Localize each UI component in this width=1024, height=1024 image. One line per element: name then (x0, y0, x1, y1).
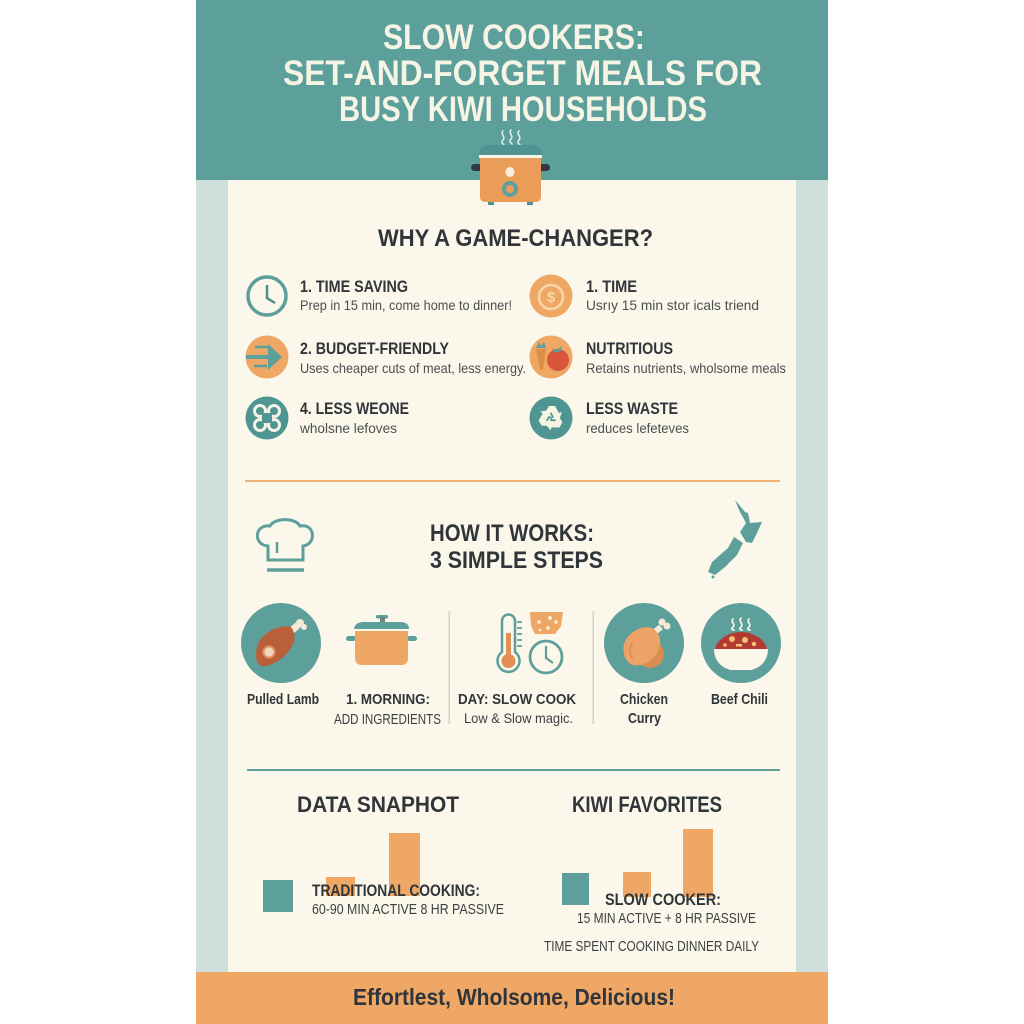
side strips (196, 170, 828, 980)
chart: traditional cooking: TRADITIONAL COOKING: (312, 882, 480, 900)
chart: traditional cooking: DATA SNAPHOT (297, 792, 460, 817)
benefit: budget-friendly: 2. BUDGET-FRIENDLY (300, 340, 449, 358)
chart: slow cooker: TIME SPENT COOKING DINNER DAILY (544, 939, 759, 955)
icon: recycle (530, 396, 572, 440)
step: pulled lamb (241, 603, 321, 708)
step: morning add ingredients (334, 615, 441, 728)
step: day slow cook (458, 612, 576, 726)
benefit: nutritious: Retains nutrients, wholsome meals (586, 360, 786, 376)
footer banner (196, 972, 828, 1024)
benefit: less waste (530, 396, 689, 440)
benefit: time saving: 1. TIME SAVING (300, 278, 408, 296)
title: SLOW COOKERS: (383, 18, 645, 57)
food: chicken curry (604, 603, 684, 727)
benefit: less weone: wholsne lefoves (299, 420, 397, 436)
food: chicken curry: Chicken (620, 691, 668, 708)
icon: coin (530, 274, 572, 318)
icon: speed arrow (246, 336, 288, 378)
icon: clock (248, 277, 286, 315)
benefit: budget-friendly: Uses cheaper cuts of meat, less energy. (300, 360, 526, 376)
icon: roast chicken (604, 603, 684, 683)
benefit: time saving (248, 277, 512, 315)
icon: thermometer (498, 615, 522, 672)
step: morning add ingredients: 1. MORNING: (346, 691, 430, 708)
icon: slow cooker (471, 130, 550, 205)
step: pulled lamb: Pulled Lamb (247, 691, 319, 708)
food: beef chili (701, 603, 781, 708)
header band (196, 0, 828, 180)
icon: knot (246, 396, 288, 440)
food: beef chili: Beef Chili (711, 691, 768, 708)
benefit: nutritious (530, 336, 786, 378)
benefit: less weone: 4. LESS WEONE (300, 400, 409, 418)
icon: vegetables (530, 336, 572, 378)
benefit: less waste: reduces lefeteves (586, 420, 689, 436)
chart: slow cooker: KIWI FAVORITES (572, 792, 722, 817)
step: morning add ingredients: ADD INGREDIENTS (334, 712, 441, 728)
icon: clock (530, 641, 562, 673)
benefit: nutritious: NUTRITIOUS (586, 340, 673, 358)
icon: New Zealand map (708, 500, 762, 578)
benefit: time: 1. TIME (586, 278, 637, 296)
step: day slow cook: DAY: SLOW COOK (458, 691, 576, 708)
benefit: budget-friendly (246, 336, 526, 378)
icon: chef hat (257, 520, 312, 570)
icon: chili bowl (701, 603, 781, 683)
heading: why a game-changer: WHY A GAME-CHANGER? (378, 225, 653, 252)
title: BUSY KIWI HOUSEHOLDS (339, 90, 707, 129)
footer banner: Effortlest, Wholsome, Delicious! (353, 984, 675, 1010)
icon: food tray (530, 612, 563, 634)
chart: traditional cooking (263, 792, 504, 918)
chart: slow cooker: 15 MIN ACTIVE + 8 HR PASSIVE (577, 911, 756, 927)
cream content panel (228, 170, 796, 980)
title (283, 18, 762, 129)
chart: traditional cooking: 60-90 MIN ACTIVE 8 HR PASSIVE (312, 902, 504, 918)
heading: how it works (430, 520, 603, 574)
food: chicken curry: Curry (628, 710, 662, 727)
step: day slow cook: Low & Slow magic. (464, 710, 573, 726)
icon: coin: $ (547, 289, 556, 306)
benefit: time: Usrıy 15 min stor icals triend (586, 297, 759, 313)
chart: slow cooker (544, 792, 759, 955)
icon: lamb drumstick (241, 603, 321, 683)
benefit: time (530, 274, 759, 318)
title: SET-AND-FORGET MEALS FOR (283, 54, 762, 93)
benefit: less waste: LESS WASTE (586, 400, 678, 418)
heading: how it works: HOW IT WORKS: (430, 520, 594, 547)
heading: how it works: 3 SIMPLE STEPS (430, 547, 603, 574)
chart: slow cooker: SLOW COOKER: (605, 891, 721, 909)
icon: cooking pot (346, 615, 417, 665)
benefit: less weone (246, 396, 409, 440)
benefit: time saving: Prep in 15 min, come home to dinner! (300, 297, 512, 313)
